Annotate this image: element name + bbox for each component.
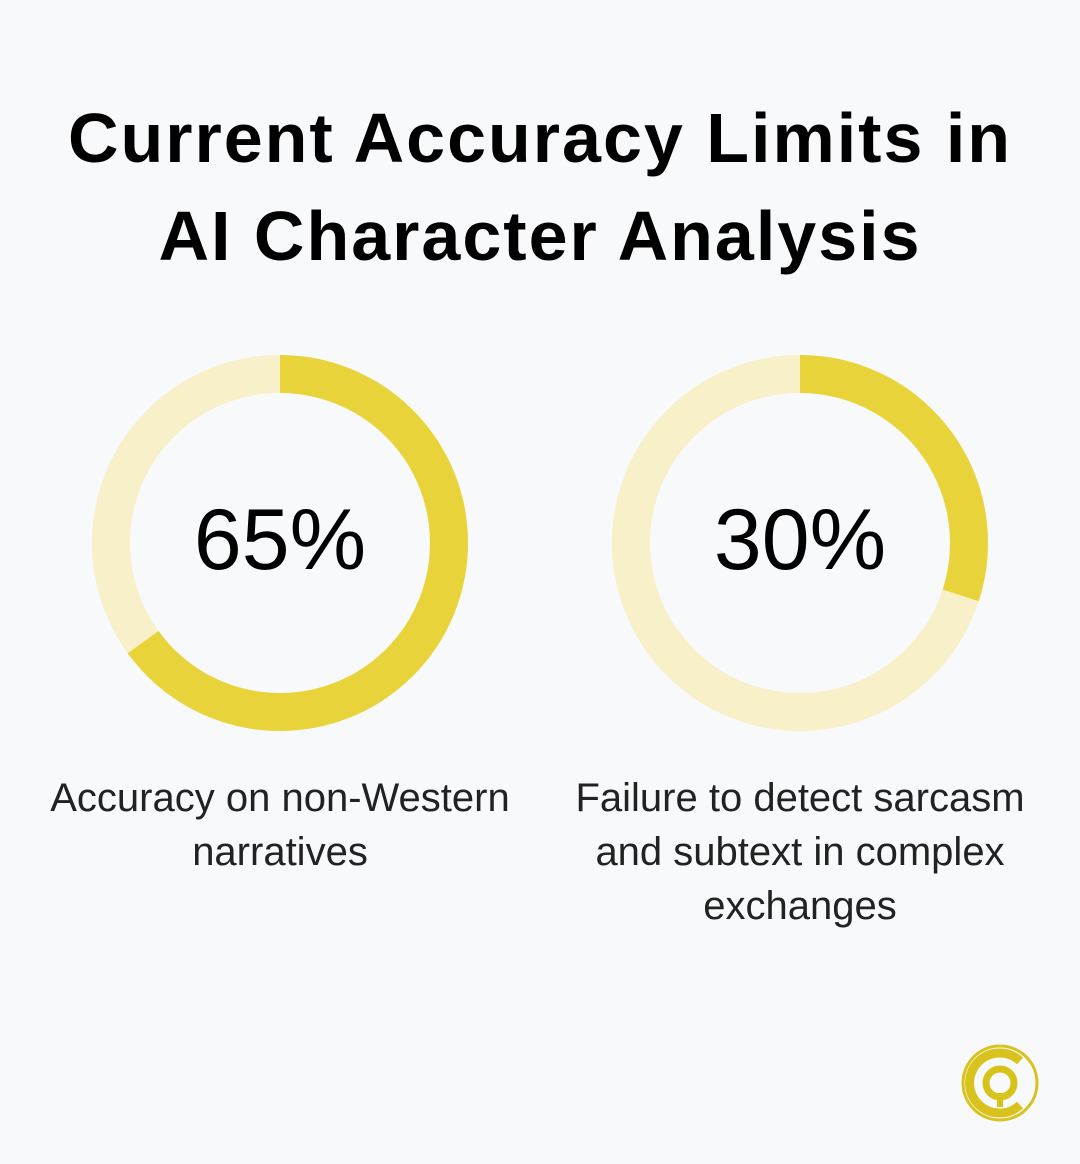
title <box>68 99 1012 275</box>
title: Current Accuracy Limits in <box>68 99 1012 177</box>
donut charts <box>92 355 988 731</box>
label: right: and subtext in complex <box>595 830 1005 874</box>
stat: 30%: 30% <box>714 492 886 588</box>
label: left: narratives <box>192 830 368 874</box>
label: right <box>575 776 1025 928</box>
title: AI Character Analysis <box>158 197 922 275</box>
label: right: exchanges <box>703 884 897 928</box>
stat: 65%: 65% <box>194 492 366 588</box>
label: right: Failure to detect sarcasm <box>575 776 1025 820</box>
icon: logo <box>962 1044 1038 1122</box>
label: left <box>50 776 510 874</box>
label: left: Accuracy on non-Western <box>50 776 510 820</box>
